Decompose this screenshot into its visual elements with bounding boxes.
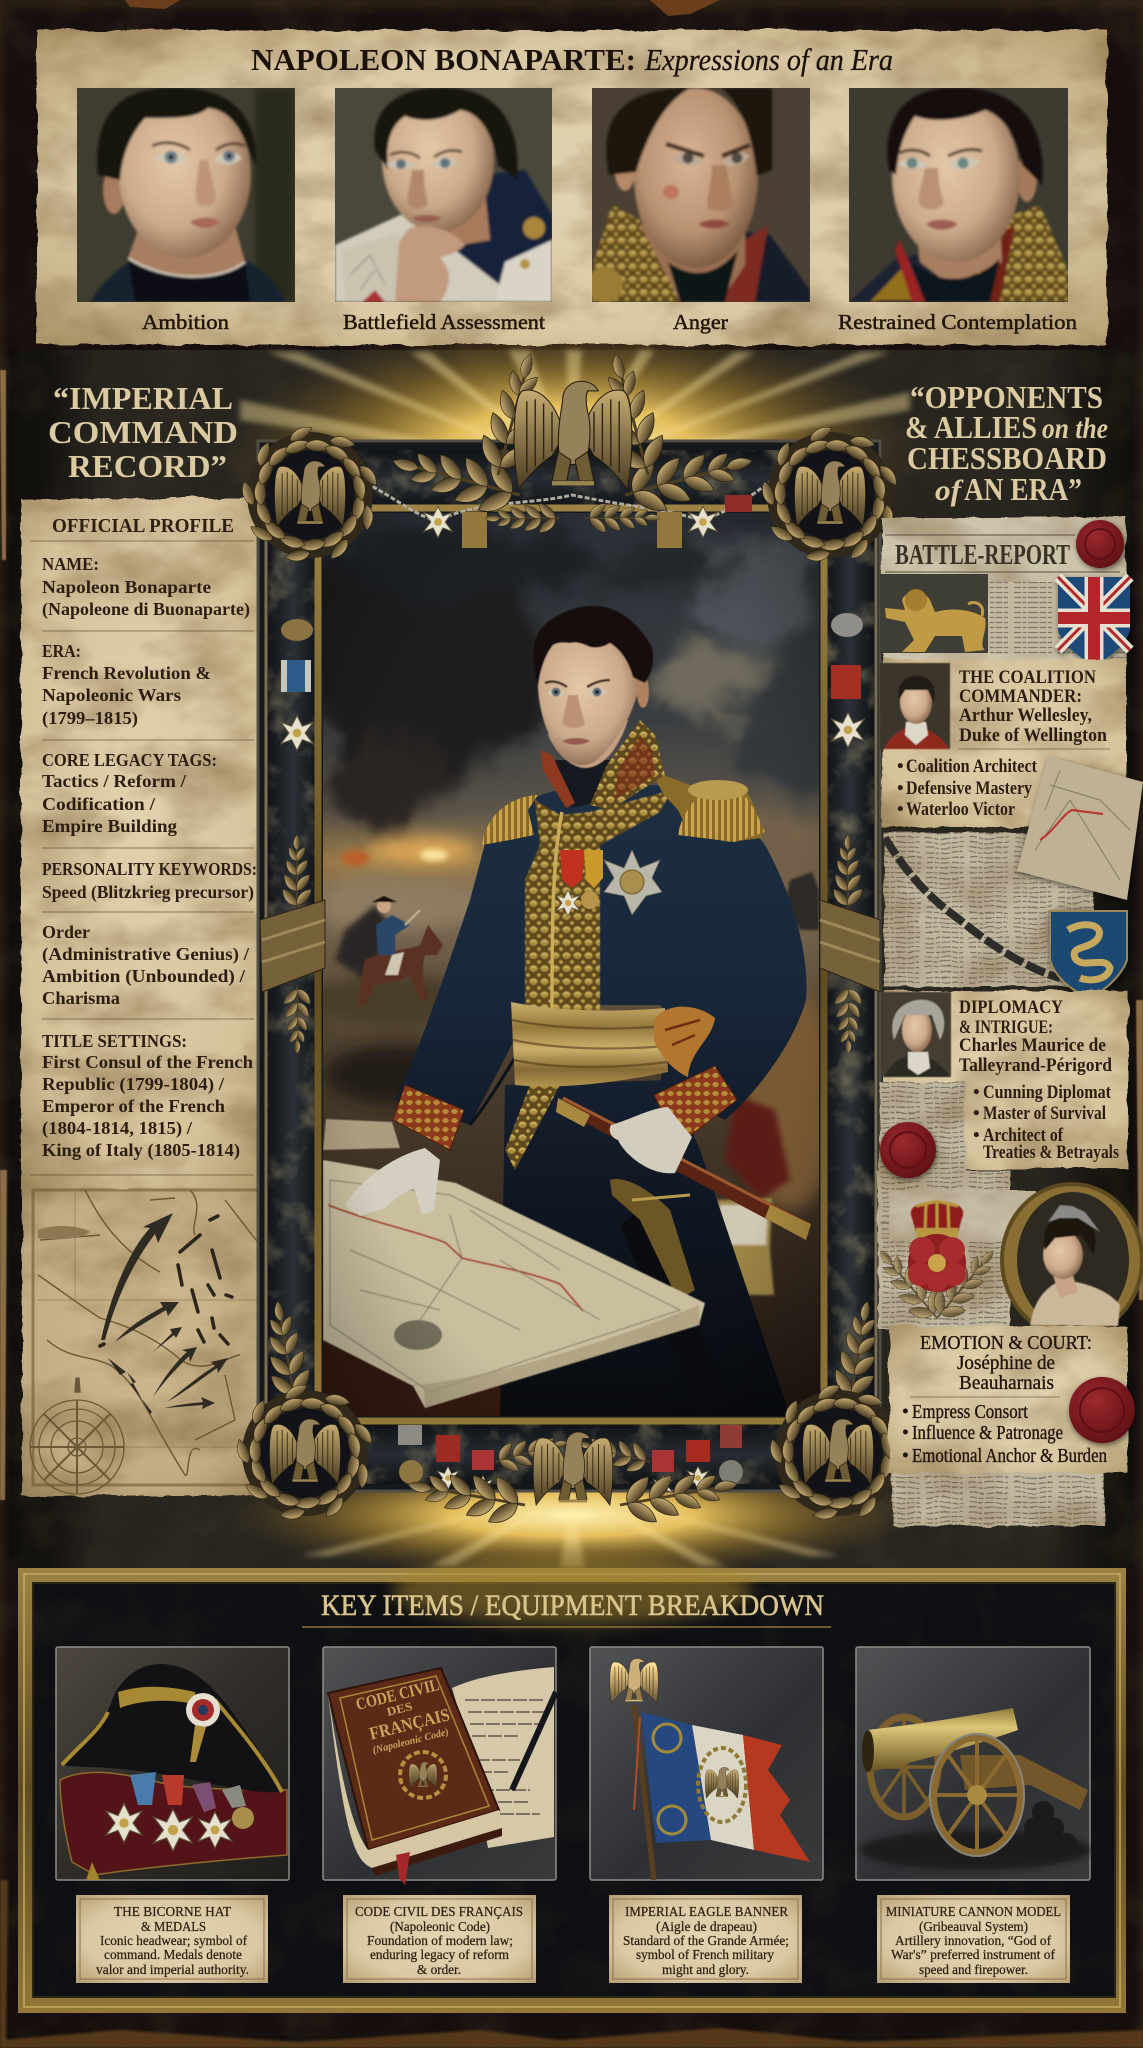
book cover title: CODE CIVIL — [354, 1675, 441, 1714]
gold eagle finial — [610, 1658, 658, 1703]
profile: era: ERA: — [42, 641, 81, 661]
profile: legacy tags: Tactics / Reform / — [42, 771, 187, 791]
plaque: bicorne hat: Iconic headwear; symbol of — [100, 1933, 247, 1948]
corner wreath top left — [239, 423, 381, 563]
news clippings behind the court card — [878, 1170, 1104, 1526]
plaque: code civil: Foundation of modern law; — [367, 1933, 513, 1948]
title: DIPLOMACY — [959, 997, 1063, 1018]
title: COMMANDER: — [959, 686, 1082, 707]
bullets: Empress Consort — [912, 1402, 1028, 1423]
Josephine oval portrait — [1002, 1184, 1142, 1336]
wooden table — [323, 1349, 500, 1416]
ribbon wraps with leaf clusters — [260, 835, 880, 1054]
newspaper under card — [884, 832, 1094, 987]
card: imperial eagle banner — [590, 1647, 823, 1880]
bullets: • — [973, 1082, 980, 1103]
plaque: imperial eagle banner: might and glory. — [662, 1962, 749, 1977]
title: Expressions of an Era — [644, 42, 893, 77]
plaque: imperial eagle banner: (Aigle de drapeau) — [656, 1919, 757, 1934]
profile: name: NAME: — [42, 554, 99, 574]
portrait: ambition — [77, 88, 295, 302]
title: Joséphine de — [957, 1353, 1055, 1374]
gold sash — [511, 1002, 715, 1087]
title: & INTRIGUE: — [959, 1017, 1053, 1038]
black bicorne — [62, 1664, 282, 1792]
heading: opponents and allies — [905, 379, 1108, 507]
book cover title: FRANÇAIS — [367, 1704, 452, 1744]
plaque: imperial eagle banner — [609, 1895, 802, 1983]
bullets: • — [897, 778, 904, 799]
profile: name — [42, 554, 250, 620]
heading: opponents and allies: on the — [1042, 412, 1108, 445]
golden radiance behind the frame — [222, 320, 922, 1577]
profile: personality: Order — [42, 922, 90, 942]
portrait captions — [142, 310, 1078, 334]
panel: emotion and court — [864, 1184, 1142, 1473]
fountain pen — [512, 1692, 556, 1790]
panel heading: KEY ITEMS / EQUIPMENT BREAKDOWN — [321, 1589, 824, 1622]
plaque: imperial eagle banner: symbol of French military — [636, 1947, 774, 1962]
plaque: miniature cannon: War's” preferred instrument of — [891, 1947, 1055, 1962]
front wheel — [930, 1734, 1024, 1856]
bullets: • — [973, 1125, 980, 1146]
Napoleon figure — [393, 606, 812, 1416]
ornate frame bars — [258, 441, 880, 1491]
profile: name: Napoleon Bonaparte — [42, 577, 211, 597]
right glove — [610, 1107, 692, 1173]
title: Charles Maurice de — [959, 1035, 1106, 1056]
profile: personality: PERSONALITY KEYWORDS: — [42, 859, 257, 879]
plaque: miniature cannon: speed and firepower. — [919, 1962, 1028, 1977]
profile: titles — [42, 1031, 253, 1161]
clipped dispatch — [880, 1082, 966, 1177]
profile: legacy tags: Empire Building — [42, 816, 177, 836]
tricolour flag — [641, 1712, 810, 1862]
profile: personality: Charisma — [42, 988, 120, 1008]
bullets — [973, 1082, 1119, 1163]
bullets: • — [973, 1103, 980, 1124]
title — [920, 1333, 1092, 1394]
card: code civil — [323, 1647, 556, 1885]
bullets: Emotional Anchor & Burden — [912, 1446, 1107, 1467]
union flag shield — [1058, 577, 1130, 665]
parchment sheet — [21, 498, 262, 1188]
frame ornaments — [234, 346, 909, 1533]
portrait captions: Battlefield Assessment — [343, 310, 545, 334]
title: Talleyrand-Périgord — [959, 1055, 1112, 1076]
title: Beauharnais — [959, 1373, 1054, 1394]
heading: opponents and allies: “OPPONENTS — [910, 379, 1103, 415]
eagle crest top — [514, 381, 632, 490]
eagle crest bottom — [533, 1432, 613, 1505]
profile: era: French Revolution & — [42, 663, 211, 683]
title — [251, 42, 893, 77]
card: bicorne hat — [56, 1647, 289, 1880]
compass rose — [30, 1378, 124, 1494]
panel: diplomacy and intrigue — [880, 991, 1128, 1178]
gilt eagle emblem — [400, 1752, 446, 1798]
plaque: code civil — [343, 1895, 536, 1983]
profile: personality — [42, 859, 257, 1008]
medal left rail — [281, 619, 313, 751]
bottom medals — [398, 1425, 743, 1496]
title: NAPOLEON BONAPARTE: — [251, 42, 636, 77]
plaque: miniature cannon — [877, 1895, 1070, 1983]
serpent shield — [1050, 911, 1127, 999]
book cover title — [354, 1674, 455, 1758]
bullets: • — [897, 756, 904, 777]
wax seal — [1069, 1377, 1135, 1443]
newspaper sheet — [882, 517, 1126, 742]
bullets: Defensive Mastery — [906, 778, 1032, 799]
Wellington portrait — [880, 663, 950, 749]
panel heading: OFFICIAL PROFILE — [52, 515, 234, 537]
bullets: Cunning Diplomat — [983, 1082, 1112, 1103]
heading: opponents and allies: CHESSBOARD — [907, 440, 1107, 476]
title: Arthur Wellesley, — [959, 705, 1092, 726]
rider on horseback — [335, 896, 443, 1005]
card sheet — [882, 659, 1126, 827]
waterloo map — [1017, 756, 1143, 900]
plaque: code civil: enduring legacy of reform — [370, 1947, 509, 1962]
carriage trail — [960, 1755, 1088, 1810]
corner wreath bottom left — [234, 1297, 376, 1521]
title — [959, 667, 1107, 746]
plaque: miniature cannon: Artillery innovation, “God of — [895, 1933, 1051, 1948]
stormy sky and battlefield — [323, 513, 819, 1408]
plaque: imperial eagle banner: Standard of the Grande Armée; — [623, 1933, 789, 1948]
plaque: bicorne hat: & MEDALS — [141, 1919, 206, 1934]
medals and star — [556, 850, 662, 916]
heading: imperial command record: COMMAND — [48, 414, 238, 450]
wax seal — [1076, 520, 1124, 568]
bullets: • — [902, 1446, 909, 1467]
parchment sheet — [37, 30, 1107, 345]
crown — [911, 1201, 963, 1237]
campaign arrows — [101, 1213, 228, 1414]
neck stock and gold collar — [540, 720, 665, 810]
profile: titles: Republic (1799-1804) / — [42, 1074, 225, 1095]
leather book — [328, 1668, 499, 1850]
pole — [634, 1705, 654, 1880]
portrait captions: Ambition — [142, 310, 230, 334]
heading: imperial command record — [48, 380, 238, 484]
bullets: • — [897, 799, 904, 820]
map border and geography — [33, 1190, 265, 1485]
corner wreath bottom right — [767, 1297, 909, 1521]
corner wreath top right — [759, 423, 901, 563]
wax seal — [880, 1122, 936, 1178]
coat body and sleeves — [395, 785, 807, 1125]
profile: era: Napoleonic Wars — [42, 685, 181, 705]
left glove — [345, 1148, 440, 1216]
heading: imperial command record: RECORD” — [68, 448, 227, 484]
title — [959, 997, 1112, 1076]
campaign map on table — [323, 1119, 705, 1408]
bullets: Waterloo Victor — [906, 799, 1015, 820]
telescope — [556, 1098, 812, 1240]
bullets: Coalition Architect — [906, 756, 1038, 777]
profile: name: (Napoleone di Buonaparte) — [42, 599, 250, 620]
heading: opponents and allies: & ALLIES — [905, 409, 1037, 445]
bullets — [902, 1402, 1107, 1467]
top chains and plaques — [360, 470, 785, 548]
plaque: code civil: CODE CIVIL DES FRANÇAIS — [355, 1904, 523, 1919]
profile: legacy tags: CORE LEGACY TAGS: — [42, 750, 217, 770]
profile: titles: First Consul of the French — [42, 1052, 253, 1072]
medal right rail — [831, 613, 864, 748]
aged map sheet — [22, 1180, 264, 1496]
plaque: code civil: (Napoleonic Code) — [390, 1919, 490, 1934]
bullets: • — [902, 1402, 909, 1423]
book cover title: (Napoleonic Code) — [372, 1727, 450, 1756]
enemy positions — [100, 1216, 232, 1346]
plaque: miniature cannon: (Gribeauval System) — [919, 1919, 1028, 1934]
gilded panel frame — [18, 1556, 1126, 2013]
heading: opponents and allies: of — [935, 474, 964, 507]
plaque: bicorne hat — [76, 1895, 268, 1983]
heading: imperial command record: “IMPERIAL — [53, 380, 233, 416]
open pages — [452, 1667, 554, 1848]
cannonballs — [1017, 1801, 1077, 1857]
embroidered cuffs — [393, 1085, 464, 1150]
plaque: imperial eagle banner: IMPERIAL EAGLE BANNER — [625, 1904, 788, 1919]
title: EMOTION & COURT: — [920, 1333, 1092, 1354]
profile: legacy tags — [42, 750, 217, 836]
Talleyrand portrait — [882, 992, 951, 1077]
top parchment banner — [37, 30, 1107, 345]
profile: personality: Ambition (Unbounded) / — [42, 966, 246, 987]
bullets: • — [902, 1423, 909, 1444]
plaque: bicorne hat: valor and imperial authority. — [96, 1962, 249, 1977]
profile: titles: (1804-1814, 1815) / — [42, 1118, 193, 1139]
gold chest embroidery — [525, 790, 672, 1012]
lion panel — [880, 574, 988, 653]
sword and hilt — [610, 1179, 695, 1295]
panel: battle map — [22, 1180, 265, 1496]
profile: titles: Emperor of the French — [42, 1096, 225, 1116]
title: THE COALITION — [959, 667, 1096, 688]
masthead text: BATTLE-REPORT — [895, 539, 1070, 571]
bullets — [897, 756, 1038, 820]
medals — [106, 1772, 254, 1851]
red sash end and tassel — [725, 1095, 790, 1200]
bullets: Architect of — [983, 1125, 1064, 1146]
profile: personality: Speed (Blitzkrieg precursor) — [42, 882, 254, 903]
bullets: Influence & Patronage — [912, 1423, 1063, 1444]
portrait: restrained contemplation — [849, 88, 1068, 302]
plaque: bicorne hat: command. Medals denote — [104, 1947, 242, 1962]
back wheel — [870, 1717, 938, 1817]
iron chain — [885, 838, 1060, 978]
card: cannon — [856, 1647, 1090, 1880]
wreath and eagle on flag — [698, 1748, 746, 1822]
book cover title: DES — [385, 1699, 414, 1719]
coat tails and trousers — [500, 1080, 790, 1416]
head — [533, 606, 653, 768]
panel: key items and equipment — [18, 1556, 1126, 2013]
plaque: miniature cannon: MINIATURE CANNON MODEL — [886, 1904, 1061, 1919]
portrait: anger — [587, 88, 810, 303]
crimson cushion — [60, 1772, 287, 1875]
profile: titles: TITLE SETTINGS: — [42, 1031, 187, 1051]
top sprigs — [385, 346, 760, 536]
portrait captions: Anger — [673, 310, 728, 334]
tricolor cockade — [186, 1693, 220, 1762]
bullets: Master of Survival — [983, 1103, 1106, 1124]
brass barrel — [867, 1708, 1018, 1772]
profile: era — [42, 641, 211, 729]
panel: battle report newspaper — [880, 517, 1130, 742]
portrait captions: Restrained Contemplation — [838, 310, 1078, 334]
rose and laurel — [864, 1234, 1009, 1332]
profile: legacy tags: Codification / — [42, 794, 156, 814]
profile: personality: (Administrative Genius) / — [42, 944, 250, 965]
profile: titles: King of Italy (1805-1814) — [42, 1140, 240, 1161]
heading: opponents and allies: AN ERA” — [964, 471, 1082, 507]
bottom sprigs — [403, 1425, 742, 1533]
panel: coalition commander — [880, 659, 1143, 999]
profile: era: (1799–1815) — [42, 708, 138, 729]
portrait: battlefield assessment — [335, 88, 552, 302]
panel: official profile — [21, 498, 262, 1188]
central framed portrait — [234, 346, 909, 1533]
plaque: bicorne hat: THE BICORNE HAT — [114, 1904, 232, 1919]
distant figures — [785, 872, 819, 930]
title: Duke of Wellington — [959, 725, 1107, 746]
epaulettes — [482, 770, 765, 845]
card sheet — [889, 1326, 1127, 1473]
plaque: code civil: & order. — [417, 1962, 461, 1977]
painting — [300, 513, 850, 1416]
card sheet — [884, 991, 1128, 1169]
